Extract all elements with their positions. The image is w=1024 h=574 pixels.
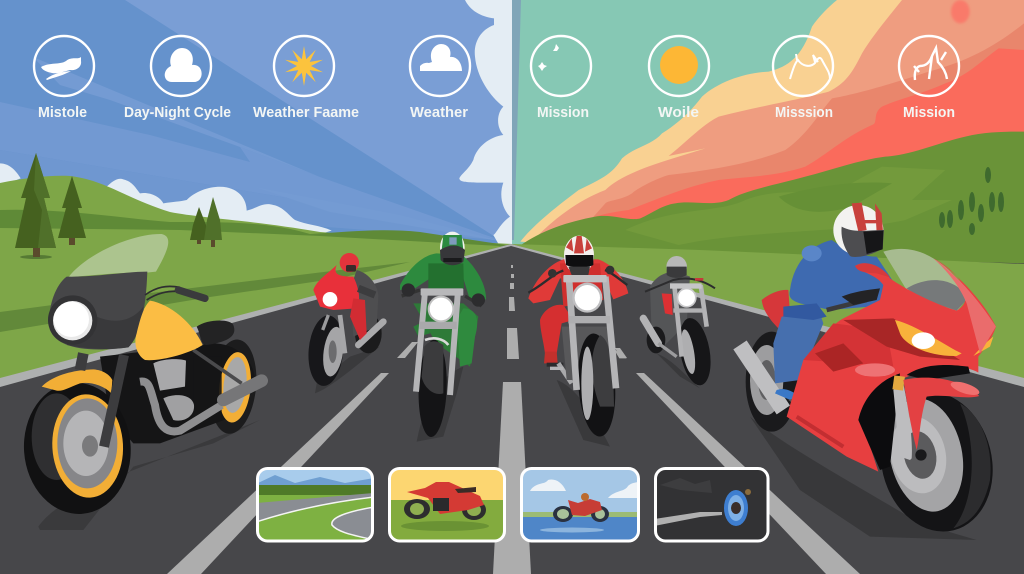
cloud row behind hills — [0, 163, 332, 240]
road — [0, 244, 1024, 574]
right hill — [519, 132, 1024, 263]
labels left: Weather — [410, 104, 468, 121]
labels left — [38, 104, 468, 121]
road edges — [0, 244, 1024, 387]
icon: sun — [649, 36, 709, 96]
big red sport bike — [740, 203, 1007, 544]
left sky — [0, 0, 512, 250]
labels right: Mission — [903, 104, 955, 121]
green rider — [400, 232, 486, 442]
thumbnail: curving road — [256, 467, 374, 545]
icon row right — [531, 36, 959, 96]
labels right — [537, 104, 955, 121]
right sky — [512, 0, 1024, 250]
icon: cloud flat — [410, 36, 470, 96]
labels right: Misssion — [775, 104, 833, 121]
cloud wall at centre — [459, 0, 512, 247]
labels left: Day-Night Cycle — [124, 104, 231, 121]
red rider centre — [528, 236, 628, 447]
left hills — [0, 176, 512, 400]
tree group left — [15, 153, 222, 259]
icon: mountain branches — [899, 36, 959, 96]
icon: mountain outline — [773, 36, 833, 96]
thumbnail: dark road with blue ring — [654, 467, 770, 543]
icon: star — [274, 36, 334, 96]
labels left: Weather Faame — [253, 104, 359, 121]
yellow motorcycle — [20, 234, 262, 530]
thumbnail: bike by water — [520, 467, 640, 545]
flame cloud bands — [520, 0, 1024, 243]
icon: sparkles — [531, 36, 591, 96]
forest dots on right hill — [939, 167, 1004, 235]
grey rider — [643, 256, 715, 388]
labels left: Mistole — [38, 104, 87, 121]
centre seam — [512, 0, 521, 240]
icon row left — [34, 36, 470, 96]
thumbnail: red bike on field — [388, 467, 506, 545]
icon: swoosh — [34, 36, 94, 96]
labels right: Woile — [658, 104, 699, 121]
right grass — [512, 244, 1024, 400]
labels right: Mission — [537, 104, 589, 121]
red rider far left — [306, 253, 383, 393]
lane markings — [167, 265, 860, 574]
thumbnail strip — [256, 467, 770, 545]
icon: cloud — [151, 36, 211, 96]
